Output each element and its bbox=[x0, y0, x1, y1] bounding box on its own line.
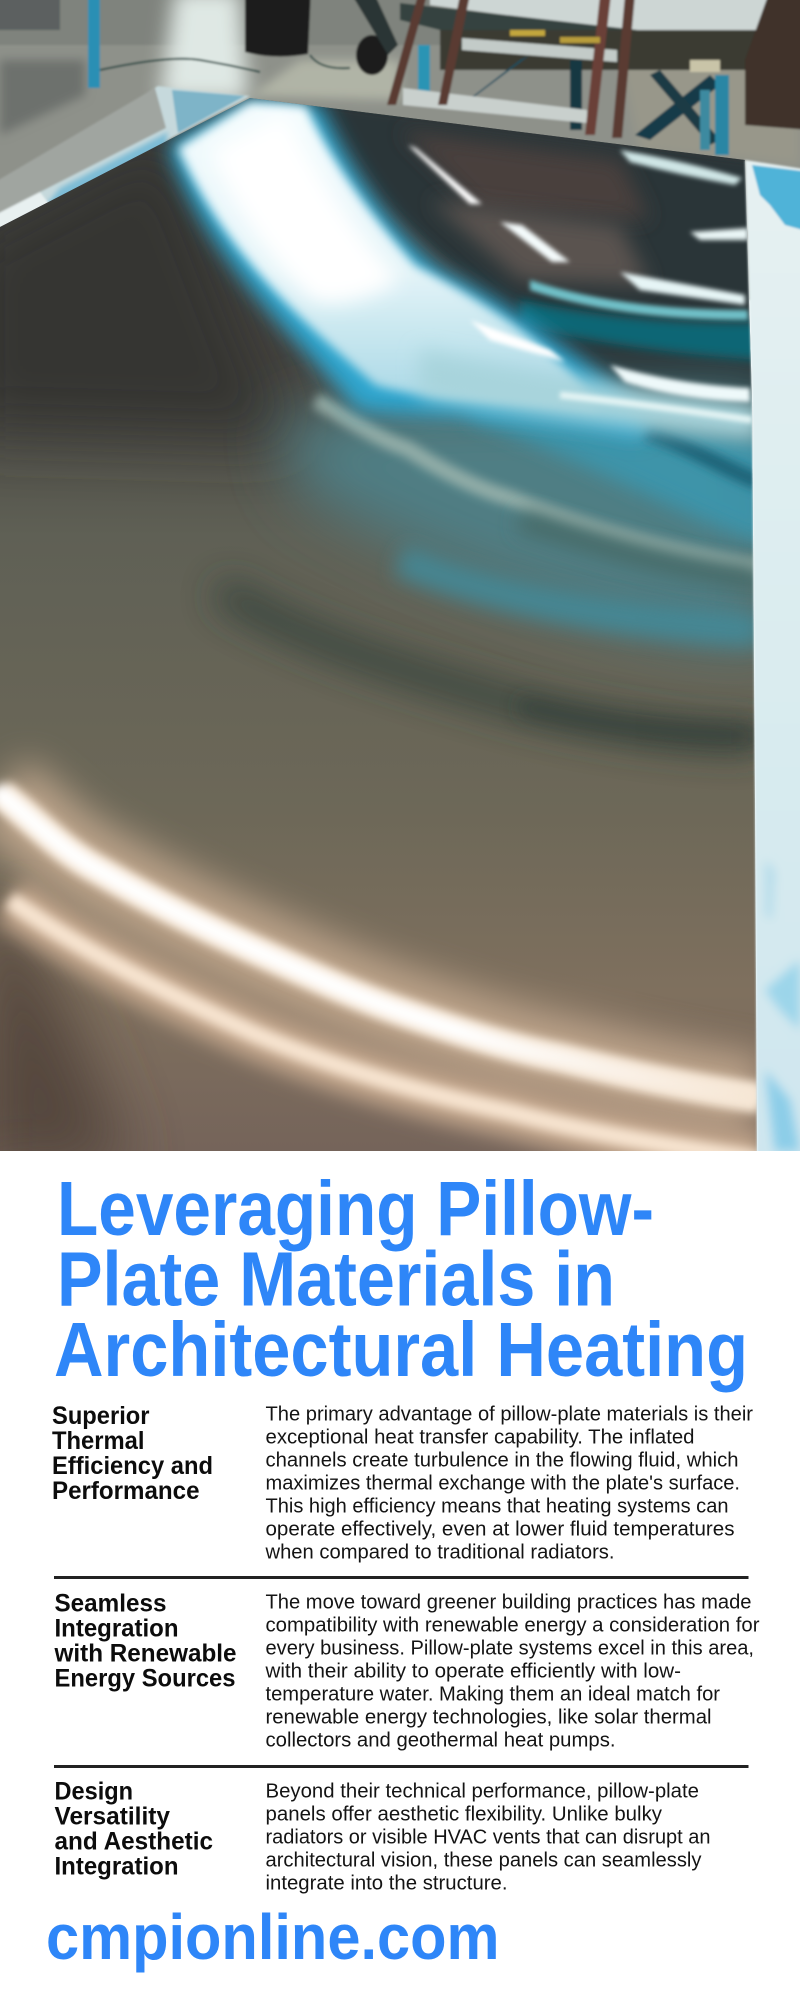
section 2 body text: The move toward greener building practices has made bbox=[266, 1591, 752, 1614]
main white highlight bbox=[178, 102, 600, 410]
section 2 heading: Integration bbox=[54, 1615, 178, 1643]
upper right dark area bbox=[310, 100, 760, 410]
plate surface bbox=[0, 90, 800, 1170]
title: Leveraging Pillow- bbox=[57, 1166, 654, 1252]
ladder legs bbox=[387, 0, 427, 105]
section 3 heading: and Aesthetic bbox=[54, 1828, 213, 1856]
section 2 body text: temperature water. Making them an ideal match for bbox=[266, 1683, 720, 1706]
section 3 body text: radiators or visible HVAC vents that can disrupt an bbox=[266, 1825, 710, 1848]
main highlight blue outline bbox=[168, 98, 650, 440]
section 1 body text: maximizes thermal exchange with the plate's surface. bbox=[266, 1472, 740, 1495]
cord bbox=[100, 55, 350, 72]
teal band area right bbox=[280, 390, 770, 650]
section 1 heading: Performance bbox=[52, 1477, 200, 1505]
section 1 heading: Efficiency and bbox=[52, 1452, 213, 1480]
title bbox=[54, 1166, 748, 1393]
section 1 body text: channels create turbulence in the flowing fluid, which bbox=[266, 1449, 738, 1472]
section 2 heading: Energy Sources bbox=[54, 1665, 236, 1693]
section 1 body text: operate effectively, even at lower fluid temperatures bbox=[266, 1518, 734, 1541]
right tape frame bbox=[745, 160, 800, 1160]
sawhorse legs bbox=[455, 55, 530, 110]
section 3 heading: Versatility bbox=[54, 1803, 170, 1831]
section 2 heading: Seamless bbox=[54, 1590, 166, 1618]
black cylinder bbox=[245, 0, 311, 57]
section 3 heading bbox=[54, 1778, 213, 1881]
pale tail of highlight bbox=[420, 350, 760, 440]
section 1 heading bbox=[52, 1402, 213, 1505]
table top at upper right bbox=[430, 0, 775, 50]
section 2 body text: with their ability to operate efficiently with low- bbox=[264, 1660, 681, 1683]
section 1 heading: Thermal bbox=[52, 1427, 144, 1455]
aluminium rails bbox=[462, 38, 617, 62]
dark cabinet right bbox=[745, 0, 800, 130]
section 1 body text bbox=[265, 1403, 753, 1564]
section 3 body text bbox=[266, 1779, 710, 1894]
section 2 heading bbox=[54, 1590, 237, 1693]
section 2 heading: with Renewable bbox=[54, 1640, 237, 1668]
section 1 body text: exceptional heat transfer capability. The inflated bbox=[266, 1426, 694, 1449]
section 1 body text: when compared to traditional radiators. bbox=[265, 1541, 614, 1564]
grey-green band bbox=[316, 400, 760, 567]
website url: cmpionline.com bbox=[46, 1901, 500, 1973]
blue leg bbox=[88, 0, 100, 88]
section 3 body text: architectural vision, these panels can seamlessly bbox=[266, 1848, 702, 1871]
section 1 heading: Superior bbox=[52, 1402, 150, 1430]
lower bright streak 2 bbox=[10, 900, 760, 1160]
section 3 body text: panels offer aesthetic flexibility. Unlike bulky bbox=[266, 1802, 663, 1825]
section 3 heading: Integration bbox=[54, 1853, 178, 1881]
warm base haze bottom bbox=[0, 902, 135, 1151]
section 3 body text: Beyond their technical performance, pillow-plate bbox=[266, 1779, 699, 1802]
wheel bbox=[356, 35, 388, 75]
section 2 body text: every business. Pillow-plate systems excel in this area, bbox=[266, 1637, 754, 1660]
section 1 body text: The primary advantage of pillow-plate materials is their bbox=[266, 1403, 753, 1426]
warm haze around lower streak 2 bbox=[10, 900, 760, 1160]
photo: pillow-plate metal sheet in workshop bbox=[0, 0, 800, 1151]
section 2 body text: compatibility with renewable energy a consideration for bbox=[266, 1614, 760, 1637]
left dark area bbox=[0, 130, 300, 440]
brown reflections upper right bbox=[400, 130, 650, 220]
section 3 heading: Design bbox=[54, 1778, 133, 1806]
section 2 body text: collectors and geothermal heat pumps. bbox=[266, 1729, 616, 1752]
small white glints bbox=[408, 145, 482, 204]
lower bright streak 1 bbox=[0, 793, 760, 1098]
section 3 body text: integrate into the structure. bbox=[266, 1871, 508, 1894]
dark band bbox=[220, 590, 760, 738]
title: Plate Materials in bbox=[57, 1237, 615, 1323]
warm haze around lower streak bbox=[0, 793, 760, 1098]
section 2 body text: renewable energy technologies, like solar thermal bbox=[266, 1706, 712, 1729]
floor and workshop background bbox=[0, 0, 800, 300]
yellow labels bbox=[510, 30, 545, 36]
blue tape frame, upper left edge bbox=[0, 86, 250, 232]
section 1 body text: This high efficiency means that heating systems can bbox=[266, 1495, 728, 1518]
section 2 body text bbox=[264, 1591, 760, 1752]
